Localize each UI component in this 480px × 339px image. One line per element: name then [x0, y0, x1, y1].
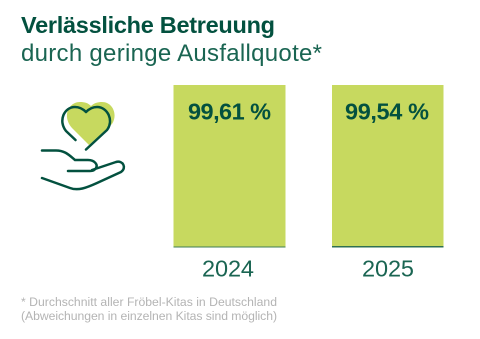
bar 2025 baseline: [332, 246, 444, 248]
icon: hand: [42, 150, 124, 189]
bar 2025: [332, 85, 444, 247]
footnote: [21, 295, 277, 323]
title: [21, 12, 322, 67]
bar 2024 baseline: [174, 246, 286, 248]
value 2024: 99,61 %: [188, 98, 271, 124]
footnote line 1: * Durchschnitt aller Fröbel-Kitas in Deutschland: [21, 295, 277, 309]
panel: bar 2024: [174, 85, 286, 282]
icon: heart fill: [67, 102, 115, 145]
footnote line 2: (Abweichungen in einzelnen Kitas sind möglich): [21, 309, 277, 323]
label 2025: 2025: [362, 256, 414, 282]
icon: hand holding heart: [42, 102, 124, 189]
panel: bar 2025: [332, 85, 444, 282]
label 2024: 2024: [202, 256, 254, 282]
title line 2: durch geringe Ausfallquote*: [21, 40, 322, 67]
bar 2024: [174, 85, 286, 247]
icon: heart outline: [62, 107, 110, 150]
title line 1: Verlässliche Betreuung: [21, 12, 275, 38]
value 2025: 99,54 %: [345, 98, 429, 124]
